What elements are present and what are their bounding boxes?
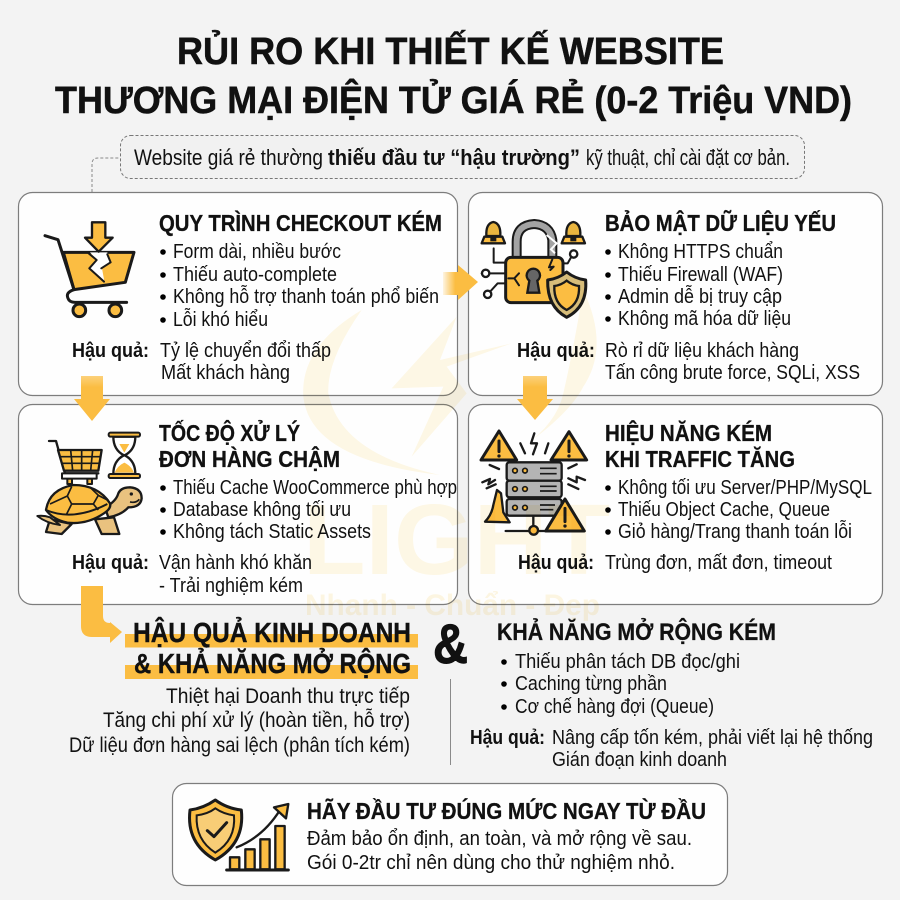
- consequence: Gián đoạn kinh doanh: [552, 748, 727, 771]
- intro callout: [120, 136, 804, 178]
- bullet list: Admin dễ bị truy cập: [618, 285, 782, 308]
- heading: BẢO MẬT DỮ LIỆU YẾU: [605, 208, 836, 236]
- bullet list: Caching từng phần: [515, 672, 667, 695]
- arrow: security to performance: [517, 376, 553, 420]
- panel: call to action: [172, 784, 728, 886]
- consequence: Mất khách hàng: [161, 361, 290, 384]
- consequence: Tỷ lệ chuyển đổi thấp: [160, 339, 331, 362]
- consequence: [517, 339, 860, 384]
- bullet list: Thiếu Cache WooCommerce phù hợp: [173, 476, 457, 499]
- icon: broken shopping cart: [45, 222, 134, 317]
- heading: [605, 419, 795, 472]
- heading: [159, 418, 340, 472]
- bullet list: Không HTTPS chuẩn: [618, 240, 783, 263]
- bullet list: Thiếu auto-complete: [173, 263, 337, 286]
- watermark: LIGHT logo: [303, 290, 610, 622]
- heading: KHẢ NĂNG MỞ RỘNG KÉM: [497, 617, 776, 646]
- heading with highlight: & KHẢ NĂNG MỞ RỘNG: [134, 647, 411, 679]
- ampersand: &: [433, 612, 468, 675]
- heading with highlight: [125, 616, 418, 679]
- bullet list: Không tách Static Assets: [173, 520, 371, 543]
- bullet list: Giỏ hàng/Trang thanh toán lỗi: [618, 520, 852, 543]
- panel: business impact: [69, 616, 418, 757]
- consequence: Hậu quả:: [470, 726, 545, 749]
- body text: Gói 0-2tr chỉ nên dùng cho thử nghiệm nhỏ.: [307, 852, 675, 874]
- icon: server with warnings: [481, 431, 587, 535]
- panel: checkout: [18, 192, 458, 396]
- bullet list: Form dài, nhiều bước: [173, 240, 341, 263]
- bullet list: Không hỗ trợ thanh toán phổ biến: [173, 285, 439, 308]
- icon: broken padlock with shield: [482, 222, 586, 317]
- consequence: Vận hành khó khăn: [159, 551, 312, 574]
- consequence: - Trải nghiệm kém: [159, 574, 303, 597]
- consequence: Trùng đơn, mất đơn, timeout: [605, 551, 832, 574]
- intro callout: kỹ thuật, chỉ cài đặt cơ bản.: [586, 145, 790, 170]
- heading: ĐƠN HÀNG CHẬM: [159, 445, 340, 472]
- watermark: LIGHT logo: LIGHT: [303, 484, 610, 596]
- bullet list: Lỗi khó hiểu: [173, 308, 268, 331]
- heading with highlight: HẬU QUẢ KINH DOANH: [133, 616, 411, 648]
- bullet list: Database không tối ưu: [173, 498, 351, 521]
- bullet list: Thiếu Object Cache, Queue: [618, 498, 830, 521]
- panel: security: [468, 192, 882, 396]
- panel: performance: [468, 404, 882, 604]
- body text: Đảm bảo ổn định, an toàn, và mở rộng về sau.: [307, 828, 692, 850]
- connector: dashed line from intro to first card: [92, 158, 120, 192]
- intro callout: Website giá rẻ thường: [134, 145, 323, 170]
- title: RỦI RO KHI THIẾT KẾ WEBSITE: [177, 29, 724, 73]
- title: THƯƠNG MẠI ĐIỆN TỬ GIÁ RẺ (0-2 Triệu VND): [55, 78, 852, 122]
- watermark: LIGHT logo: Nhanh - Chuẩn - Đẹp: [305, 589, 600, 622]
- icon: turtle with cart and hourglass: [37, 433, 142, 534]
- heading: TỐC ĐỘ XỬ LÝ: [159, 418, 300, 446]
- arrow: checkout to order speed: [74, 376, 110, 421]
- impact list: [69, 685, 410, 757]
- heading: HÃY ĐẦU TƯ ĐÚNG MỨC NGAY TỪ ĐẦU: [307, 797, 706, 824]
- arrow: checkout to security: [443, 265, 478, 300]
- body text: [307, 828, 692, 874]
- consequence: Hậu quả:: [72, 551, 149, 574]
- intro callout: thiếu đầu tư “hậu trường”: [328, 145, 580, 170]
- consequence: Hậu quả:: [517, 339, 595, 362]
- title: [55, 29, 852, 122]
- bullet list: Cơ chế hàng đợi (Queue): [515, 695, 714, 718]
- impact list: Thiệt hại Doanh thu trực tiếp: [166, 685, 410, 708]
- heading: HIỆU NĂNG KÉM: [605, 419, 772, 446]
- heading: QUY TRÌNH CHECKOUT KÉM: [159, 209, 442, 236]
- consequence: [470, 726, 873, 771]
- bullet list: Không mã hóa dữ liệu: [618, 307, 791, 330]
- consequence: [72, 551, 312, 597]
- panel: order speed: [18, 404, 458, 604]
- bullet list: [605, 476, 872, 543]
- impact list: Dữ liệu đơn hàng sai lệch (phân tích kém): [69, 734, 410, 757]
- consequence: Tấn công brute force, SQLi, XSS: [605, 361, 860, 384]
- heading: KHI TRAFFIC TĂNG: [605, 445, 795, 472]
- bullet list: [160, 240, 439, 331]
- bullet list: [160, 476, 457, 543]
- impact list: Tăng chi phí xử lý (hoàn tiền, hỗ trợ): [103, 709, 410, 732]
- bullet list: Thiếu phân tách DB đọc/ghi: [515, 650, 740, 673]
- bullet list: [501, 650, 740, 718]
- consequence: [72, 339, 331, 384]
- icon: shield with growth chart: [190, 800, 288, 870]
- bullet list: [605, 240, 791, 330]
- consequence: Hậu quả:: [518, 551, 594, 574]
- panel: scalability: [470, 617, 873, 771]
- consequence: Rò rỉ dữ liệu khách hàng: [605, 339, 799, 362]
- consequence: Hậu quả:: [72, 339, 149, 362]
- arrow: order speed to business impact: [81, 586, 122, 643]
- bullet list: Thiếu Firewall (WAF): [618, 263, 783, 286]
- consequence: [518, 551, 832, 574]
